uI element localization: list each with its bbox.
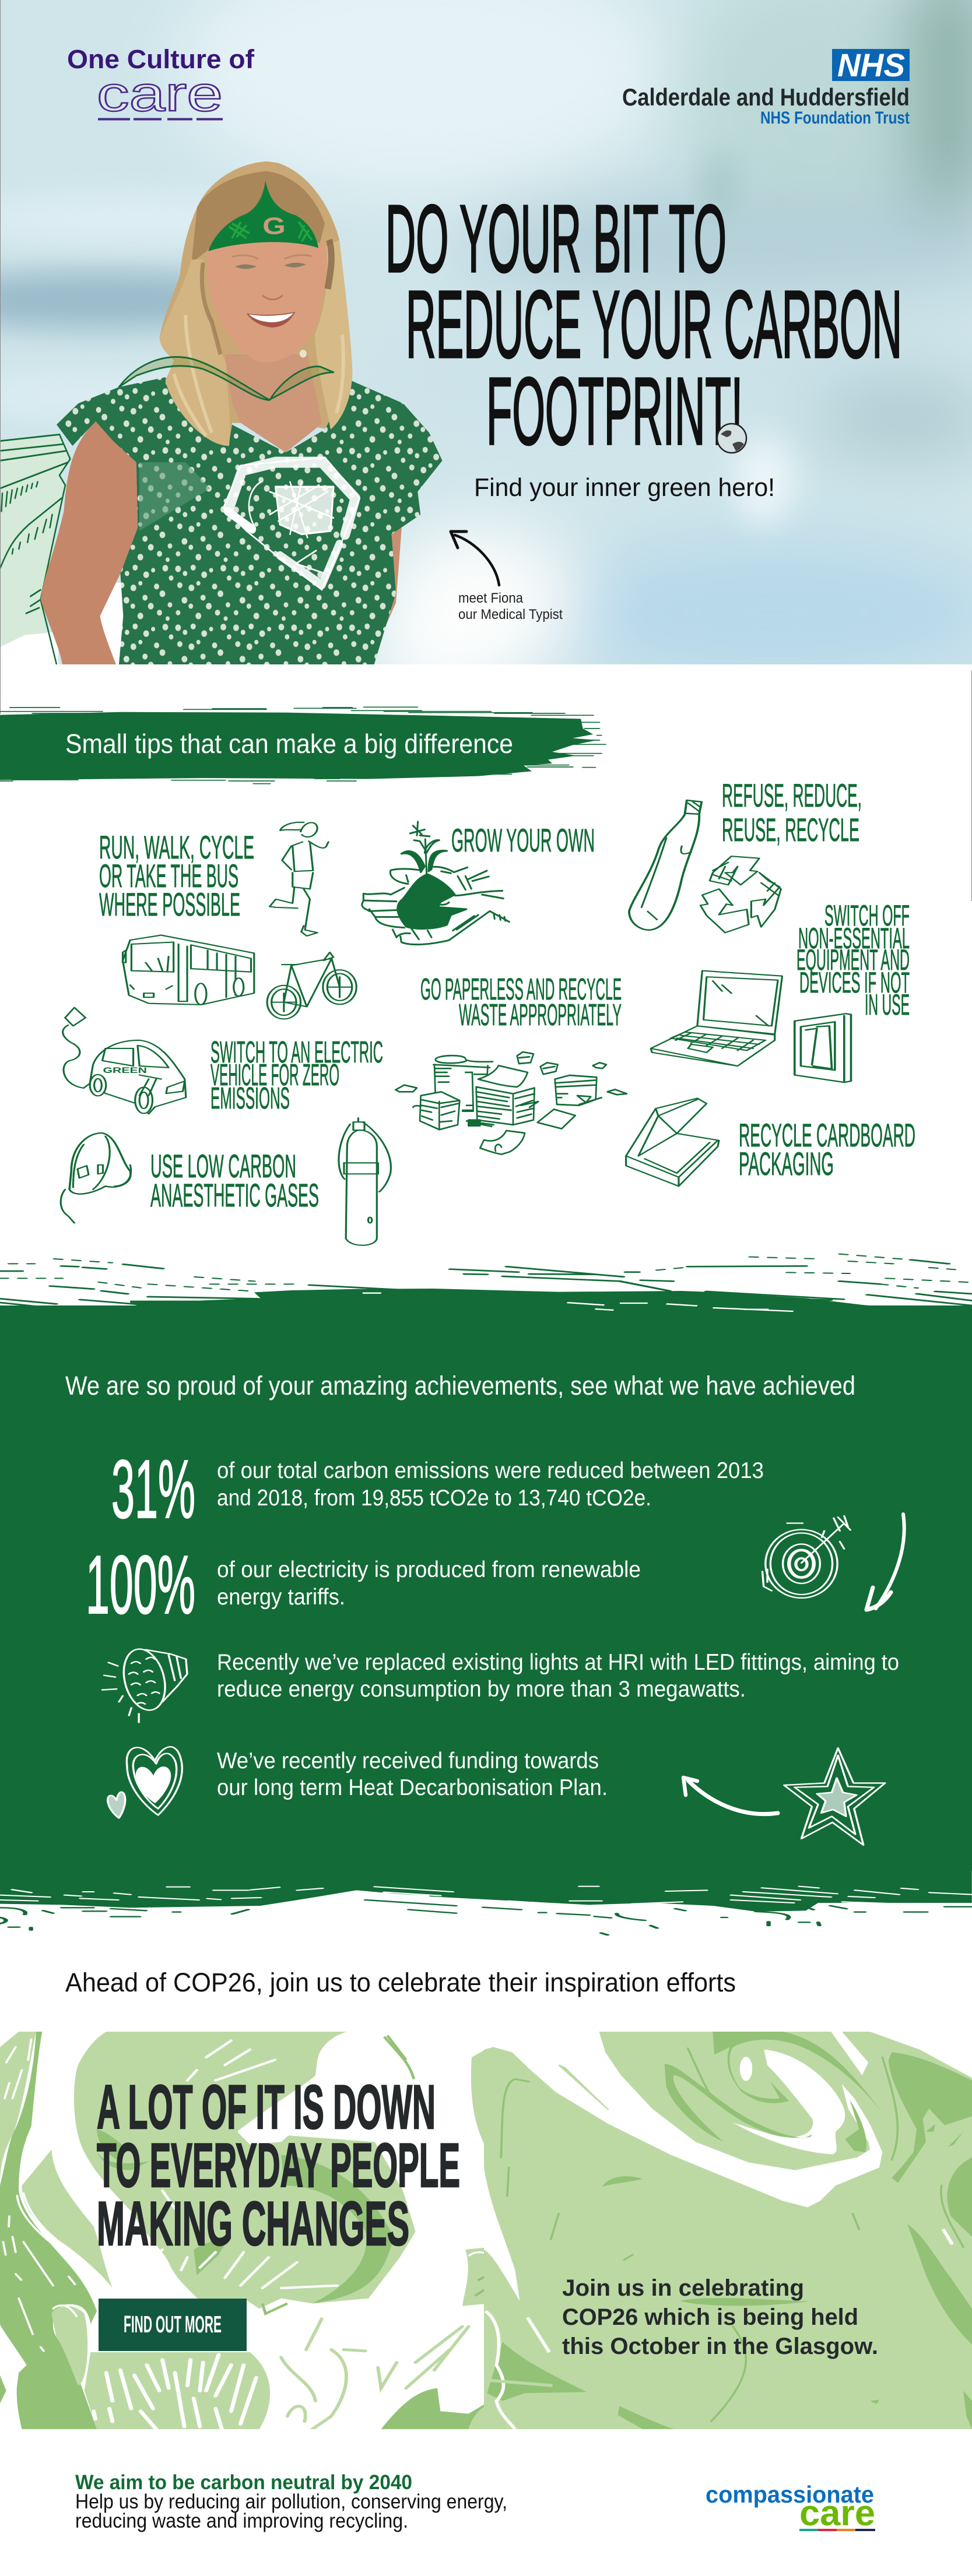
logo: One Culture of care: care bbox=[97, 66, 223, 121]
logo: NHS trust: Calderdale and Huddersfield bbox=[622, 83, 910, 111]
arrow: pointing to text bbox=[683, 1778, 778, 1814]
tip: recycle cardboard bbox=[739, 1117, 915, 1182]
person: Fiona bbox=[0, 161, 443, 664]
footer text: We aim to be carbon neutral by 2040 bbox=[75, 2471, 412, 2494]
floral dress bbox=[57, 377, 443, 664]
icon: runner bbox=[269, 822, 328, 936]
achievement: LED lights bbox=[217, 1650, 899, 1702]
icon: electric car: GREEN bbox=[103, 1066, 147, 1075]
left arm bbox=[41, 421, 138, 664]
text: join us in celebrating: Join us in celebrating bbox=[562, 2275, 804, 2301]
stat: 100%: of our electricity is produced from renewable bbox=[217, 1557, 641, 1582]
footer text: reducing waste and improving recycling. bbox=[75, 2510, 408, 2532]
icon: gas cylinder bbox=[339, 1118, 391, 1245]
icon: hearts bbox=[108, 1747, 182, 1818]
title bbox=[385, 185, 902, 464]
icon: hands with plant bbox=[362, 822, 509, 945]
logo: NHS trust bbox=[622, 47, 910, 128]
icon: bicycle bbox=[267, 952, 356, 1019]
caption: meet Fiona: meet Fiona bbox=[458, 590, 524, 606]
tip: refuse, reduce, reuse, recycle bbox=[722, 777, 862, 848]
text: GO PAPERLESS AND RECYCLE bbox=[420, 973, 622, 1007]
icon: plastic bottle bbox=[629, 800, 701, 930]
chest and neck bbox=[224, 354, 322, 452]
logo: NHS trust: NHS bbox=[837, 47, 905, 83]
panel: hero bbox=[0, 0, 972, 699]
text: join us in celebrating: this October in the Glasgow. bbox=[562, 2334, 878, 2359]
logo: compassionate care: care bbox=[799, 2493, 875, 2533]
tip: recycle cardboard: PACKAGING bbox=[739, 1145, 834, 1182]
icon: laptop bbox=[651, 971, 782, 1066]
panel: achievements bbox=[0, 1254, 972, 1935]
tip: switch to electric vehicle bbox=[210, 1036, 383, 1115]
tip: go paperless bbox=[420, 973, 622, 1032]
icon: globe bbox=[717, 424, 746, 453]
icon: bus bbox=[122, 935, 254, 1005]
icon: star bbox=[784, 1748, 885, 1845]
right arm bbox=[386, 527, 402, 625]
tip: low carbon anaesthetic gases: USE LOW CARBON bbox=[150, 1148, 296, 1184]
text: join us in celebrating bbox=[562, 2275, 878, 2359]
stat: 100%: 100% bbox=[86, 1539, 195, 1631]
caption: meet Fiona: our Medical Typist bbox=[458, 607, 563, 622]
green hero cape bbox=[0, 434, 70, 664]
face features bbox=[232, 255, 312, 358]
logo: One Culture of care bbox=[67, 44, 255, 121]
dark ribbon on left bbox=[0, 2032, 97, 2429]
tip: switch to electric vehicle: EMISSIONS bbox=[210, 1082, 290, 1115]
text: IN USE bbox=[865, 988, 910, 1021]
heading band: small tips: Small tips that can make a big difference bbox=[65, 729, 513, 759]
headline bbox=[97, 2072, 460, 2258]
bottom swirl zone bbox=[85, 2352, 270, 2429]
button: find out more: FIND OUT MORE bbox=[124, 2311, 222, 2338]
text: GROW YOUR OWN bbox=[451, 822, 595, 858]
white scribble emblem bbox=[223, 458, 360, 590]
page edge lines bbox=[0, 0, 971, 901]
tip: run, walk, cycle bbox=[99, 829, 254, 923]
panel: marble banner bbox=[0, 2032, 972, 2434]
face bbox=[207, 239, 327, 363]
logo: compassionate care bbox=[706, 2481, 875, 2533]
icon: cardboard box bbox=[626, 1098, 719, 1186]
subtitle: Find your inner green hero! bbox=[474, 473, 775, 502]
marble left half bbox=[0, 2032, 490, 2429]
heading band: small tips bbox=[0, 707, 605, 784]
green mask with letter G: G bbox=[262, 213, 286, 240]
marble right half bbox=[484, 2032, 972, 2434]
icon: light switch bbox=[795, 1013, 851, 1082]
icon: LED bulb bbox=[102, 1647, 187, 1722]
cape collar outline bbox=[119, 357, 334, 400]
achievement: heat decarbonisation bbox=[217, 1748, 608, 1800]
icon: anaesthetic mask bbox=[61, 1133, 131, 1223]
button: find out more bbox=[99, 2299, 247, 2351]
logo: compassionate care: compassionate bbox=[706, 2481, 874, 2508]
stat: 100%: energy tariffs. bbox=[217, 1585, 345, 1610]
stat: 100% bbox=[86, 1539, 641, 1631]
text: ANAESTHETIC GASES bbox=[150, 1177, 319, 1213]
logo: NHS trust: NHS Foundation Trust bbox=[760, 108, 910, 128]
tip: run, walk, cycle: RUN, WALK, CYCLE bbox=[99, 829, 254, 865]
text: WASTE APPROPRIATELY bbox=[459, 998, 622, 1032]
achievement: heat decarbonisation: our long term Heat Decarbonisation Plan. bbox=[217, 1775, 608, 1800]
hair, back layer bbox=[160, 161, 352, 446]
icon: recycle symbol bbox=[700, 856, 781, 932]
stat: 31%: of our total carbon emissions were reduced between 2013 bbox=[217, 1458, 764, 1483]
headline: MAKING CHANGES bbox=[97, 2188, 409, 2258]
tip: switch to electric vehicle: VEHICLE FOR ZERO bbox=[210, 1058, 339, 1092]
heading: achievements: We are so proud of your amazing achievements, see what we have achieved bbox=[65, 1371, 855, 1400]
stat: 31%: and 2018, from 19,855 tCO2e to 13,740 tCO2e. bbox=[217, 1486, 651, 1511]
text: SWITCH TO AN ELECTRIC bbox=[210, 1036, 383, 1069]
achievement: LED lights: Recently we’ve replaced existing lights at HRI with LED fittings, aiming to bbox=[217, 1650, 899, 1675]
arrow: to Fiona bbox=[451, 532, 499, 585]
tip: run, walk, cycle: WHERE POSSIBLE bbox=[99, 886, 240, 923]
green brush panel bbox=[0, 1254, 972, 1935]
text: join us in celebrating: COP26 which is being held bbox=[562, 2304, 858, 2330]
hero blurred hospital background bbox=[0, 0, 972, 699]
tip: switch off equipment bbox=[796, 899, 910, 1021]
green mask with letter G bbox=[208, 180, 318, 251]
stat: 31% bbox=[111, 1443, 764, 1536]
tip: low carbon anaesthetic gases bbox=[150, 1148, 319, 1213]
tip: run, walk, cycle: OR TAKE THE BUS bbox=[99, 857, 238, 894]
achievement: heat decarbonisation: We’ve recently received funding towards bbox=[217, 1748, 599, 1773]
footer text: Help us by reducing air pollution, conserving energy, bbox=[75, 2490, 507, 2513]
achievement: LED lights: reduce energy consumption by more than 3 megawatts. bbox=[217, 1677, 746, 1702]
footer text bbox=[75, 2471, 507, 2532]
icon: electric car bbox=[63, 1008, 186, 1114]
icon: target with arrow bbox=[762, 1516, 850, 1598]
headline: A LOT OF IT IS DOWN bbox=[97, 2072, 436, 2142]
headline: TO EVERYDAY PEOPLE bbox=[97, 2130, 460, 2200]
stat: 31%: 31% bbox=[111, 1443, 195, 1536]
heading: COP26: Ahead of COP26, join us to celebrate their inspiration efforts bbox=[65, 1968, 736, 1997]
arrow: pointing down bbox=[866, 1514, 904, 1610]
caption: meet Fiona bbox=[458, 590, 563, 622]
hair, front strands bbox=[160, 240, 352, 446]
logo: One Culture of care: One Culture of bbox=[67, 44, 255, 74]
icon: paper stacks bbox=[395, 1052, 627, 1155]
marble texture bbox=[0, 2032, 972, 2434]
